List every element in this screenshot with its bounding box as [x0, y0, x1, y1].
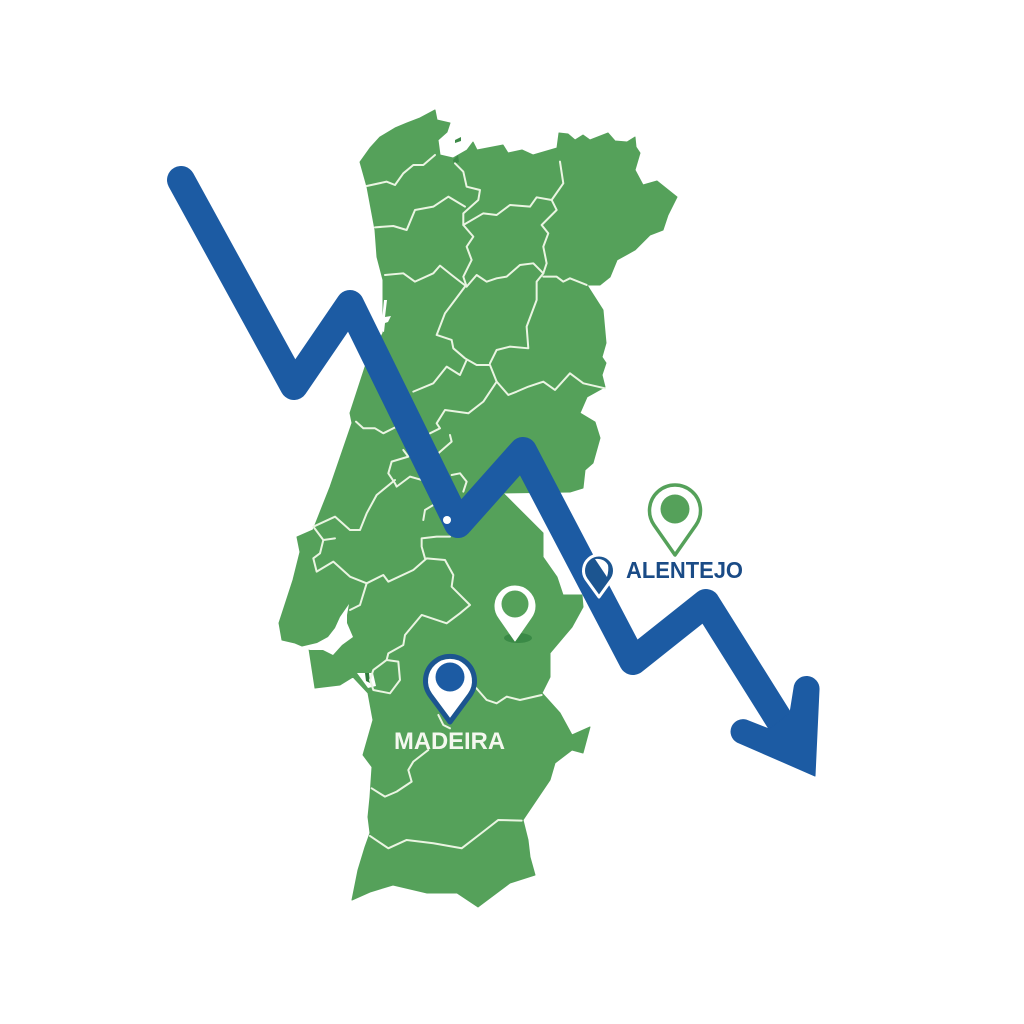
mainland silhouette — [279, 110, 677, 907]
regional borders south — [313, 480, 542, 848]
label: Alentejo: ALENTEJO — [626, 557, 743, 583]
Sado dark inlet — [365, 673, 370, 683]
pin: small blue on line — [584, 555, 614, 597]
white node on line — [443, 516, 451, 524]
pin: green outline — [650, 485, 700, 555]
map: Portugal regions — [279, 110, 677, 907]
downward trend arrow — [181, 180, 819, 776]
regional borders north — [356, 155, 605, 492]
trend line — [181, 180, 790, 737]
Sado estuary — [357, 673, 376, 688]
label: Madeira: MADEIRA — [394, 728, 505, 755]
pin: white on map — [495, 586, 535, 641]
arrowhead — [731, 676, 819, 776]
coastal lagoon — [381, 300, 391, 332]
pin: blue Madeira — [426, 656, 474, 722]
northern coast islet — [453, 137, 461, 164]
Tagus estuary — [300, 604, 353, 655]
pin shadow — [504, 633, 532, 643]
